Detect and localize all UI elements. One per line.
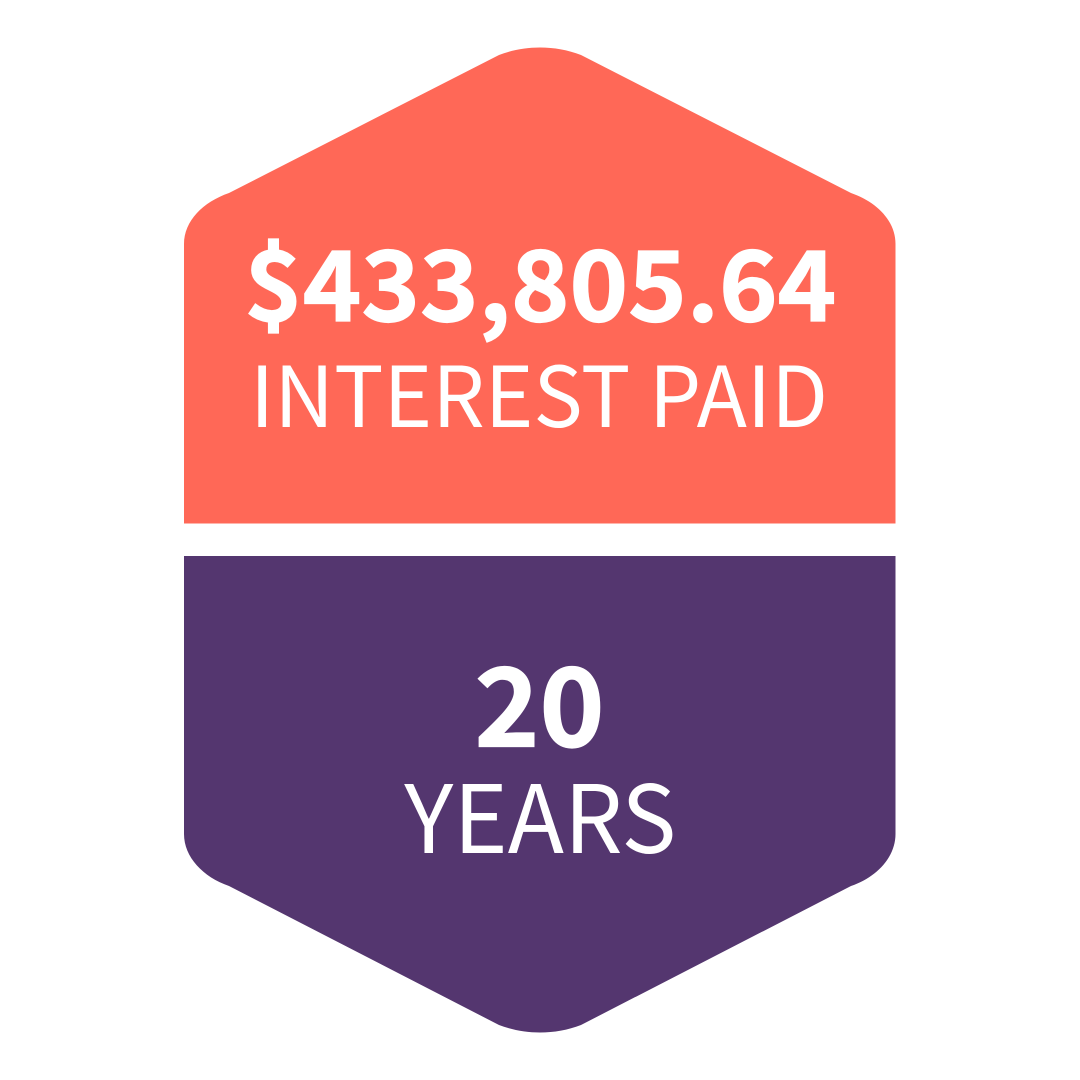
interest amount: $433,805.64 (244, 208, 836, 349)
panel: interest paid (184, 48, 896, 524)
term label: YEARS (403, 745, 676, 881)
purple hexagon bottom shape (184, 556, 896, 1032)
panel: term (184, 556, 896, 1032)
interest label: INTEREST PAID (250, 331, 828, 452)
term number: 20 (474, 622, 604, 778)
coral hexagon top shape (184, 48, 896, 524)
